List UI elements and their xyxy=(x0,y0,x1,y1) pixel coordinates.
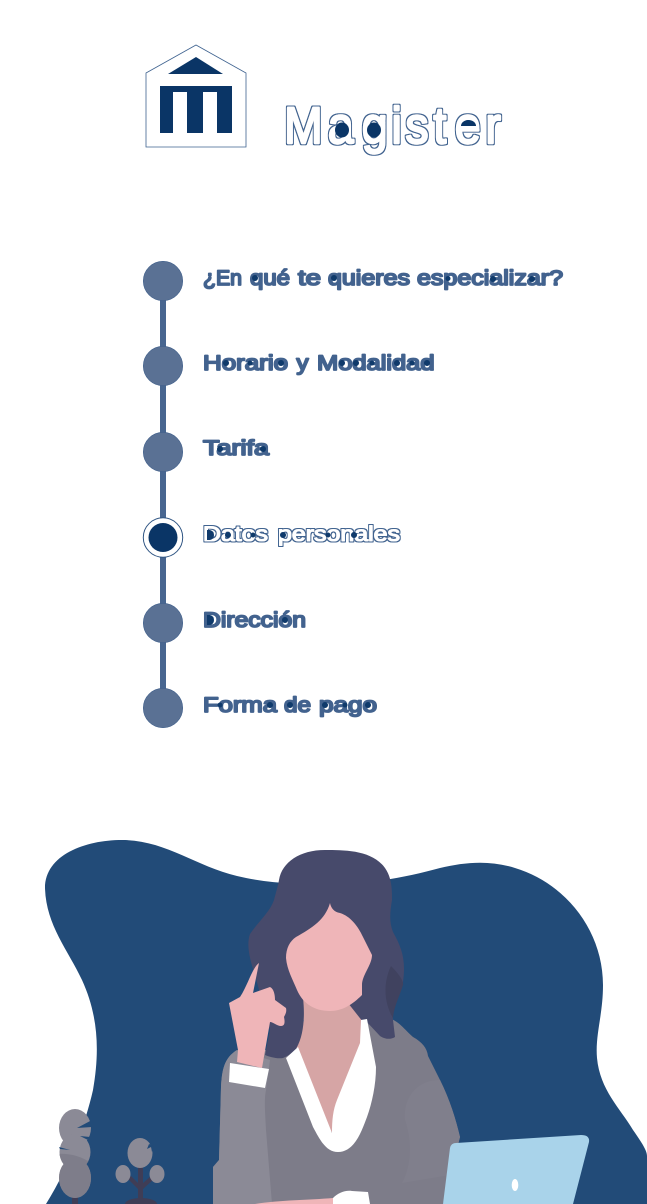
logo house outline xyxy=(146,45,246,147)
step 2 xyxy=(143,346,435,386)
laptop xyxy=(443,1135,589,1204)
background blob xyxy=(45,840,647,1204)
cuff xyxy=(229,1063,269,1088)
hair xyxy=(248,850,404,1058)
step 2: Modalidad xyxy=(317,352,434,375)
neck and chest xyxy=(296,998,363,1135)
white blouse xyxy=(286,1019,376,1152)
face xyxy=(286,903,372,1011)
middle tree xyxy=(116,1138,164,1204)
step 5: Dirección xyxy=(203,609,306,632)
step 3 xyxy=(143,432,269,472)
step 5 xyxy=(143,603,306,643)
laptop logo xyxy=(512,1179,518,1191)
step 2: Horario xyxy=(203,352,288,375)
step 1 xyxy=(143,261,563,301)
step 6 xyxy=(143,688,377,728)
step 1: qué xyxy=(250,267,290,290)
step 1: especializar? xyxy=(417,267,563,290)
step 6: Forma xyxy=(203,694,277,717)
step 4 active xyxy=(143,518,400,557)
logo roof xyxy=(168,57,223,74)
left tree xyxy=(59,1109,91,1204)
hair shadow xyxy=(385,966,403,1018)
brand name: Magister xyxy=(284,98,501,155)
logo columns xyxy=(160,86,232,133)
step 2: y xyxy=(296,352,309,375)
logo xyxy=(146,45,246,147)
sweater xyxy=(213,1018,460,1204)
stepper xyxy=(143,261,563,728)
step 4 active: personales xyxy=(278,523,400,546)
wrist xyxy=(255,1198,336,1204)
lower cuff xyxy=(333,1191,370,1204)
step 6: de xyxy=(284,694,311,717)
right sleeve highlight xyxy=(402,1080,460,1183)
illustration xyxy=(45,840,647,1204)
step 6: pago xyxy=(319,694,377,717)
step 3: Tarifa xyxy=(203,437,269,460)
step 1: ¿En xyxy=(203,267,242,290)
step 1: te xyxy=(298,267,321,290)
hand xyxy=(229,963,286,1068)
left sleeve xyxy=(213,1050,272,1204)
step 1: quieres xyxy=(328,267,410,290)
person xyxy=(213,850,460,1204)
step 4 active: Datos xyxy=(203,523,268,546)
stepper connector line xyxy=(160,281,166,708)
